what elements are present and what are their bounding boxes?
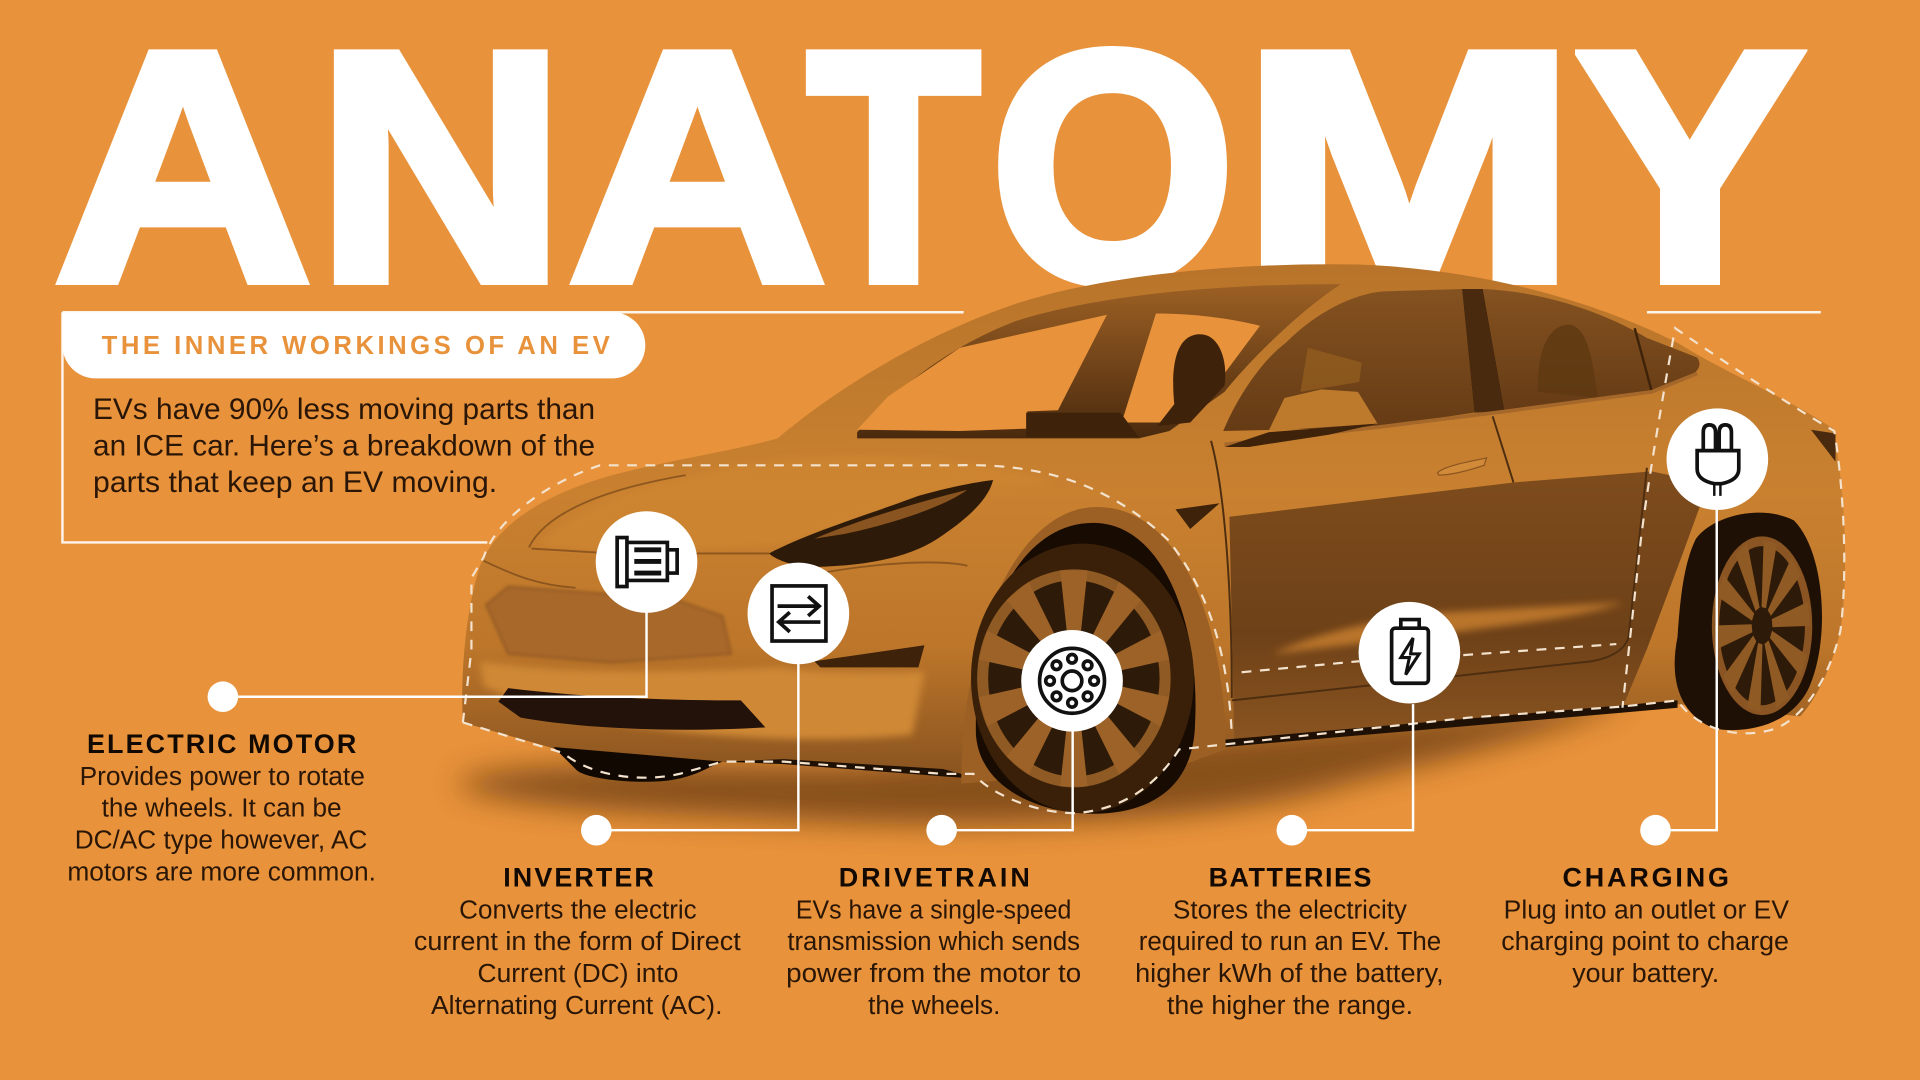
label: electric motor: DC/AC type however, AC: [75, 825, 367, 855]
wheel arch: [976, 523, 1196, 814]
label: electric motor: motors are more common.: [67, 856, 376, 886]
intro text: EVs have 90% less moving parts than: [93, 393, 595, 426]
header rule: left: [62, 312, 964, 542]
intro text: parts that keep an EV moving.: [93, 466, 497, 499]
label: drivetrain: DRIVETRAIN: [839, 863, 1030, 893]
label: inverter: INVERTER: [503, 863, 654, 893]
connector: drivetrain: [926, 731, 1073, 846]
icon: inverter: [748, 563, 849, 664]
label: charging: CHARGING: [1562, 863, 1729, 893]
label: batteries: required to run an EV. The: [1139, 926, 1441, 956]
header rule: right: [1647, 311, 1821, 313]
label: inverter: current in the form of Direct: [414, 926, 742, 956]
label: charging: [1501, 863, 1789, 988]
label: drivetrain: EVs have a single-speed: [796, 894, 1071, 924]
tail light: [1811, 430, 1836, 462]
connector: batteries: [1277, 704, 1413, 846]
label: batteries: higher kWh of the battery,: [1135, 958, 1444, 988]
car illustration: [456, 264, 1845, 824]
label: inverter: Current (DC) into: [478, 958, 678, 988]
rim interior: [988, 580, 1160, 776]
label: batteries: BATTERIES: [1209, 863, 1371, 893]
front wheel: [961, 507, 1226, 814]
side repeater: [1176, 503, 1220, 529]
door highlight: [1272, 602, 1624, 654]
intro text: [93, 393, 595, 499]
rear quarter divider: [1635, 328, 1652, 392]
door shading: [1229, 471, 1708, 741]
dashboard: [1026, 413, 1139, 437]
ground shadow: [456, 698, 1629, 824]
label: batteries: Stores the electricity: [1173, 894, 1408, 924]
door handle: [1438, 458, 1487, 475]
rear side window: [1483, 289, 1699, 411]
chin shadow: [553, 747, 722, 782]
sill shadow: [1182, 700, 1678, 749]
rear rim: [1712, 536, 1812, 715]
label: charging: charging point to charge: [1501, 926, 1789, 956]
air intake: [498, 688, 765, 730]
icon: charging plug: [1667, 408, 1768, 510]
spokes: [979, 570, 1169, 786]
subtitle pill: [62, 312, 645, 378]
label: drivetrain: transmission which sends: [787, 926, 1080, 956]
mirror: [1224, 389, 1378, 447]
label: inverter: Converts the electric: [459, 894, 697, 924]
label: drivetrain: power from the motor to: [786, 958, 1081, 988]
car body: [462, 264, 1845, 774]
intro text: an ICE car. Here’s a breakdown of the: [93, 430, 595, 463]
rear spokes: [1714, 540, 1810, 712]
label: batteries: the higher the range.: [1167, 990, 1413, 1020]
hood highlight: [539, 456, 1053, 553]
label: electric motor: Provides power to rotate: [80, 761, 365, 791]
rear seat headrest: [1538, 324, 1598, 398]
label: inverter: [414, 863, 742, 1020]
fog light strip: [814, 645, 924, 667]
label: electric motor: ELECTRIC MOTOR: [87, 729, 356, 759]
label: batteries: [1135, 863, 1444, 1020]
label: electric motor: the wheels. It can be: [102, 793, 342, 823]
headlight: [769, 480, 993, 567]
label: charging: your battery.: [1572, 958, 1719, 988]
title: [54, 0, 1808, 350]
label: drivetrain: the wheels.: [868, 990, 1000, 1020]
b pillar: [1462, 289, 1505, 413]
window tint patch: [1300, 348, 1362, 392]
icon: electric motor: [596, 511, 697, 613]
icon: drivetrain: [1021, 630, 1123, 732]
rear tire: [1675, 513, 1822, 730]
tire: [971, 544, 1194, 813]
hood and fender creases: [484, 475, 967, 588]
label: electric motor: [67, 729, 376, 886]
label: inverter: Alternating Current (AC).: [431, 990, 722, 1020]
label: drivetrain: [786, 863, 1081, 1020]
headlight reflection: [814, 490, 967, 539]
rim: [977, 569, 1171, 787]
roof glass: [857, 284, 1341, 438]
front side window: [1223, 289, 1474, 431]
icon: battery: [1359, 602, 1460, 703]
rear rim interior: [1719, 546, 1805, 705]
windshield left pane: [857, 315, 1107, 431]
upper bumper recess: [486, 587, 731, 662]
windshield right pane: [1122, 313, 1260, 422]
connector: charging: [1640, 509, 1717, 846]
dashed component outlines: [463, 328, 1844, 813]
bumper highlight: [480, 661, 924, 739]
wheel arch lip: [961, 507, 1226, 784]
door lines: [1211, 416, 1647, 700]
subtitle pill: THE INNER WORKINGS OF AN EV: [102, 332, 610, 360]
driver head: [1157, 334, 1225, 426]
connector: electric motor: [208, 612, 647, 712]
window belt line: [1224, 373, 1697, 444]
connector: inverter: [581, 664, 798, 846]
rear wheel: [1675, 513, 1822, 730]
label: charging: Plug into an outlet or EV: [1504, 894, 1789, 924]
